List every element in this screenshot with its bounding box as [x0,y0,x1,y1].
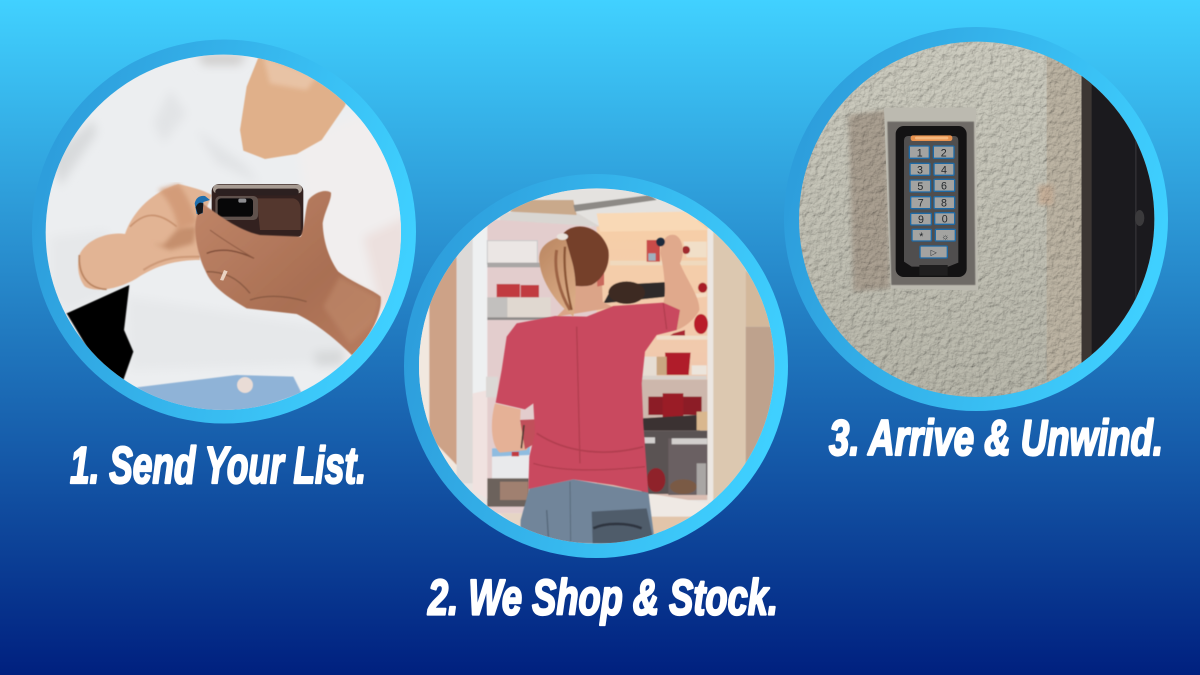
woman seen from behind [492,227,699,543]
door shelf items [487,241,537,264]
keypad [884,108,978,291]
jeans [520,479,655,543]
keypad digits: 0 [942,213,948,225]
keypad digits: * [919,231,923,243]
keypad digits: 1 [917,147,923,159]
ring: step 2 [404,174,788,558]
keypad digits: 9 [918,214,924,226]
keypad digits: 8 [941,198,947,210]
stucco wall [797,40,1157,400]
right hand [195,191,381,357]
photo: hands holding a phone [40,50,407,417]
neck and shoulders [557,282,612,316]
caption: step 2: 2. We Shop & Stock. [427,570,778,626]
neck and chest skin [240,53,350,159]
caption: step 1: 1. Send Your List. [70,437,366,495]
ring: step 1 [32,40,416,424]
keypad digits: 4 [941,164,947,176]
door latch [1135,210,1144,226]
left hand and forearm [78,184,212,290]
lower arm [492,403,535,453]
photo: woman stocking a fridge [417,187,777,547]
keypad keys [909,146,955,258]
keypad digits [917,147,949,257]
keypad digits: 7 [918,198,924,210]
door frame [1082,76,1154,363]
red t-shirt [496,303,680,493]
raised arm [660,235,699,330]
keypad digits: 3 [917,164,923,176]
keypad digits: ☼ [941,231,949,241]
smartphone [212,184,303,237]
painted nails [195,196,210,214]
keypad digits: ▷ [931,248,938,257]
keypad digits: 2 [941,147,947,159]
panel: step 2 we shop and stock [404,174,788,558]
ring on finger [220,270,228,281]
keypad digits: 5 [917,181,923,193]
ring: step 3 [784,27,1168,411]
keypad digits: 6 [941,180,947,192]
keypad status light [911,135,952,141]
photo: door keypad on a stucco wall [797,40,1157,400]
fridge shelves and food [610,261,707,265]
hair and ponytail [562,227,609,286]
panel: step 1 send your list [32,40,416,424]
panel: step 3 arrive and unwind [784,27,1168,411]
